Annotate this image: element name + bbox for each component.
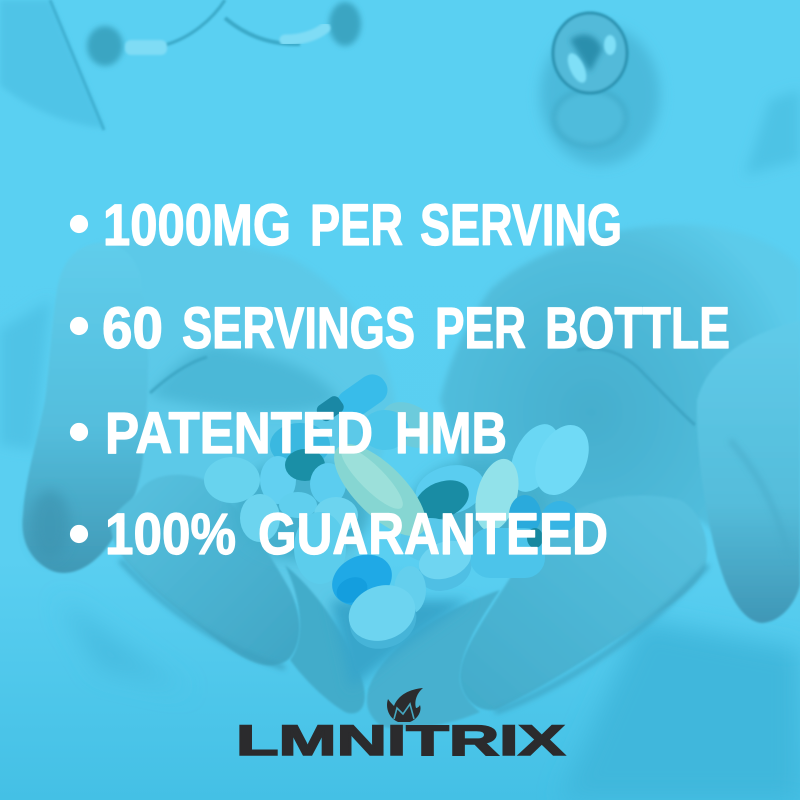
bullet 4: 100% <box>105 502 236 567</box>
bullet 3 <box>70 401 507 466</box>
bullet 1: PER <box>310 193 403 258</box>
logo: LMNITRIX <box>236 688 565 765</box>
little finger <box>697 320 800 623</box>
bullet 3: PATENTED <box>105 401 373 466</box>
bullet 1: 1000MG <box>103 193 291 258</box>
bullet 3: HMB <box>395 401 507 466</box>
pills pile <box>204 369 599 690</box>
left hand <box>22 237 395 713</box>
bullet 1 <box>70 193 622 258</box>
bullet 2 <box>70 296 730 361</box>
bullet 4: GUARANTEED <box>258 502 608 567</box>
bullet list <box>70 193 730 567</box>
palm <box>83 237 395 620</box>
palm <box>440 225 800 600</box>
tablet: light <box>341 576 425 658</box>
bullet 1: SERVING <box>420 193 622 258</box>
icon: stethoscope <box>87 0 660 165</box>
tablet: blue <box>324 545 400 615</box>
wordmark: LMNITRIX <box>236 717 565 765</box>
icon: flame <box>387 688 423 722</box>
bullet 2: BOTTLE <box>545 296 730 361</box>
outer finger <box>22 243 148 573</box>
second finger <box>111 475 300 665</box>
bullet 2: 60 <box>102 296 163 361</box>
capsule: top blue <box>314 369 393 424</box>
right hand <box>367 225 800 729</box>
capsule: large green <box>320 430 440 550</box>
bullet 2: SERVINGS <box>182 296 415 361</box>
thumb <box>460 495 707 710</box>
third finger <box>285 565 365 713</box>
bullet 4 <box>70 502 608 567</box>
lower finger <box>367 590 500 729</box>
bullet 2: PER <box>435 296 526 361</box>
